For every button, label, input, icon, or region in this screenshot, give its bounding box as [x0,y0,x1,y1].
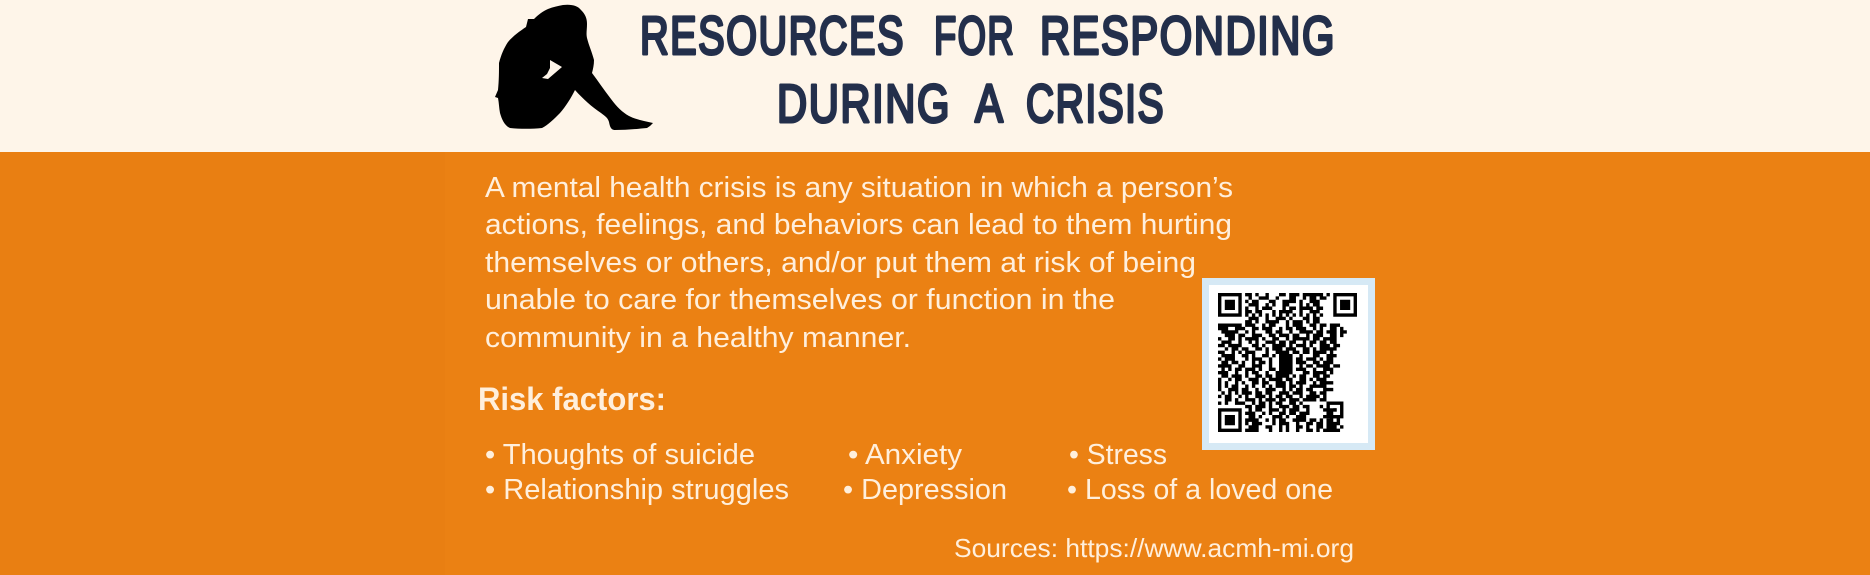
intro paragraph: A mental health crisis is any situation in which a person’s [485,172,1233,204]
title: A [975,75,1003,134]
title: FOR [934,7,1015,66]
risk factor list: • Relationship struggles [485,474,789,506]
intro paragraph: actions, feelings, and behaviors can lead to them hurting [485,209,1232,241]
intro paragraph [485,172,1233,354]
risk factor list: • Thoughts of suicide [485,439,755,471]
risk factor list: • Stress [1069,439,1167,471]
intro paragraph: themselves or others, and/or put them at risk of being [485,247,1196,279]
title: RESPONDING [1040,7,1336,66]
title: CRISIS [1026,75,1165,134]
risk factor list: • Depression [843,474,1007,506]
title: RESOURCES [640,7,905,66]
sources line: Sources: https://www.acmh-mi.org [954,533,1354,563]
risk factor list: • Anxiety [848,439,963,471]
risk factors heading: Risk factors: [478,381,666,417]
header band [0,0,1870,152]
title [640,7,1336,134]
risk factor list: • Loss of a loved one [1067,474,1333,506]
icon: crouching person silhouette [495,5,653,130]
intro paragraph: community in a healthy manner. [485,322,911,354]
orange content panel [0,152,1870,575]
QR code [1202,278,1375,450]
risk factor list [485,439,1333,506]
title: DURING [777,75,951,134]
intro paragraph: unable to care for themselves or function in the [485,284,1115,316]
